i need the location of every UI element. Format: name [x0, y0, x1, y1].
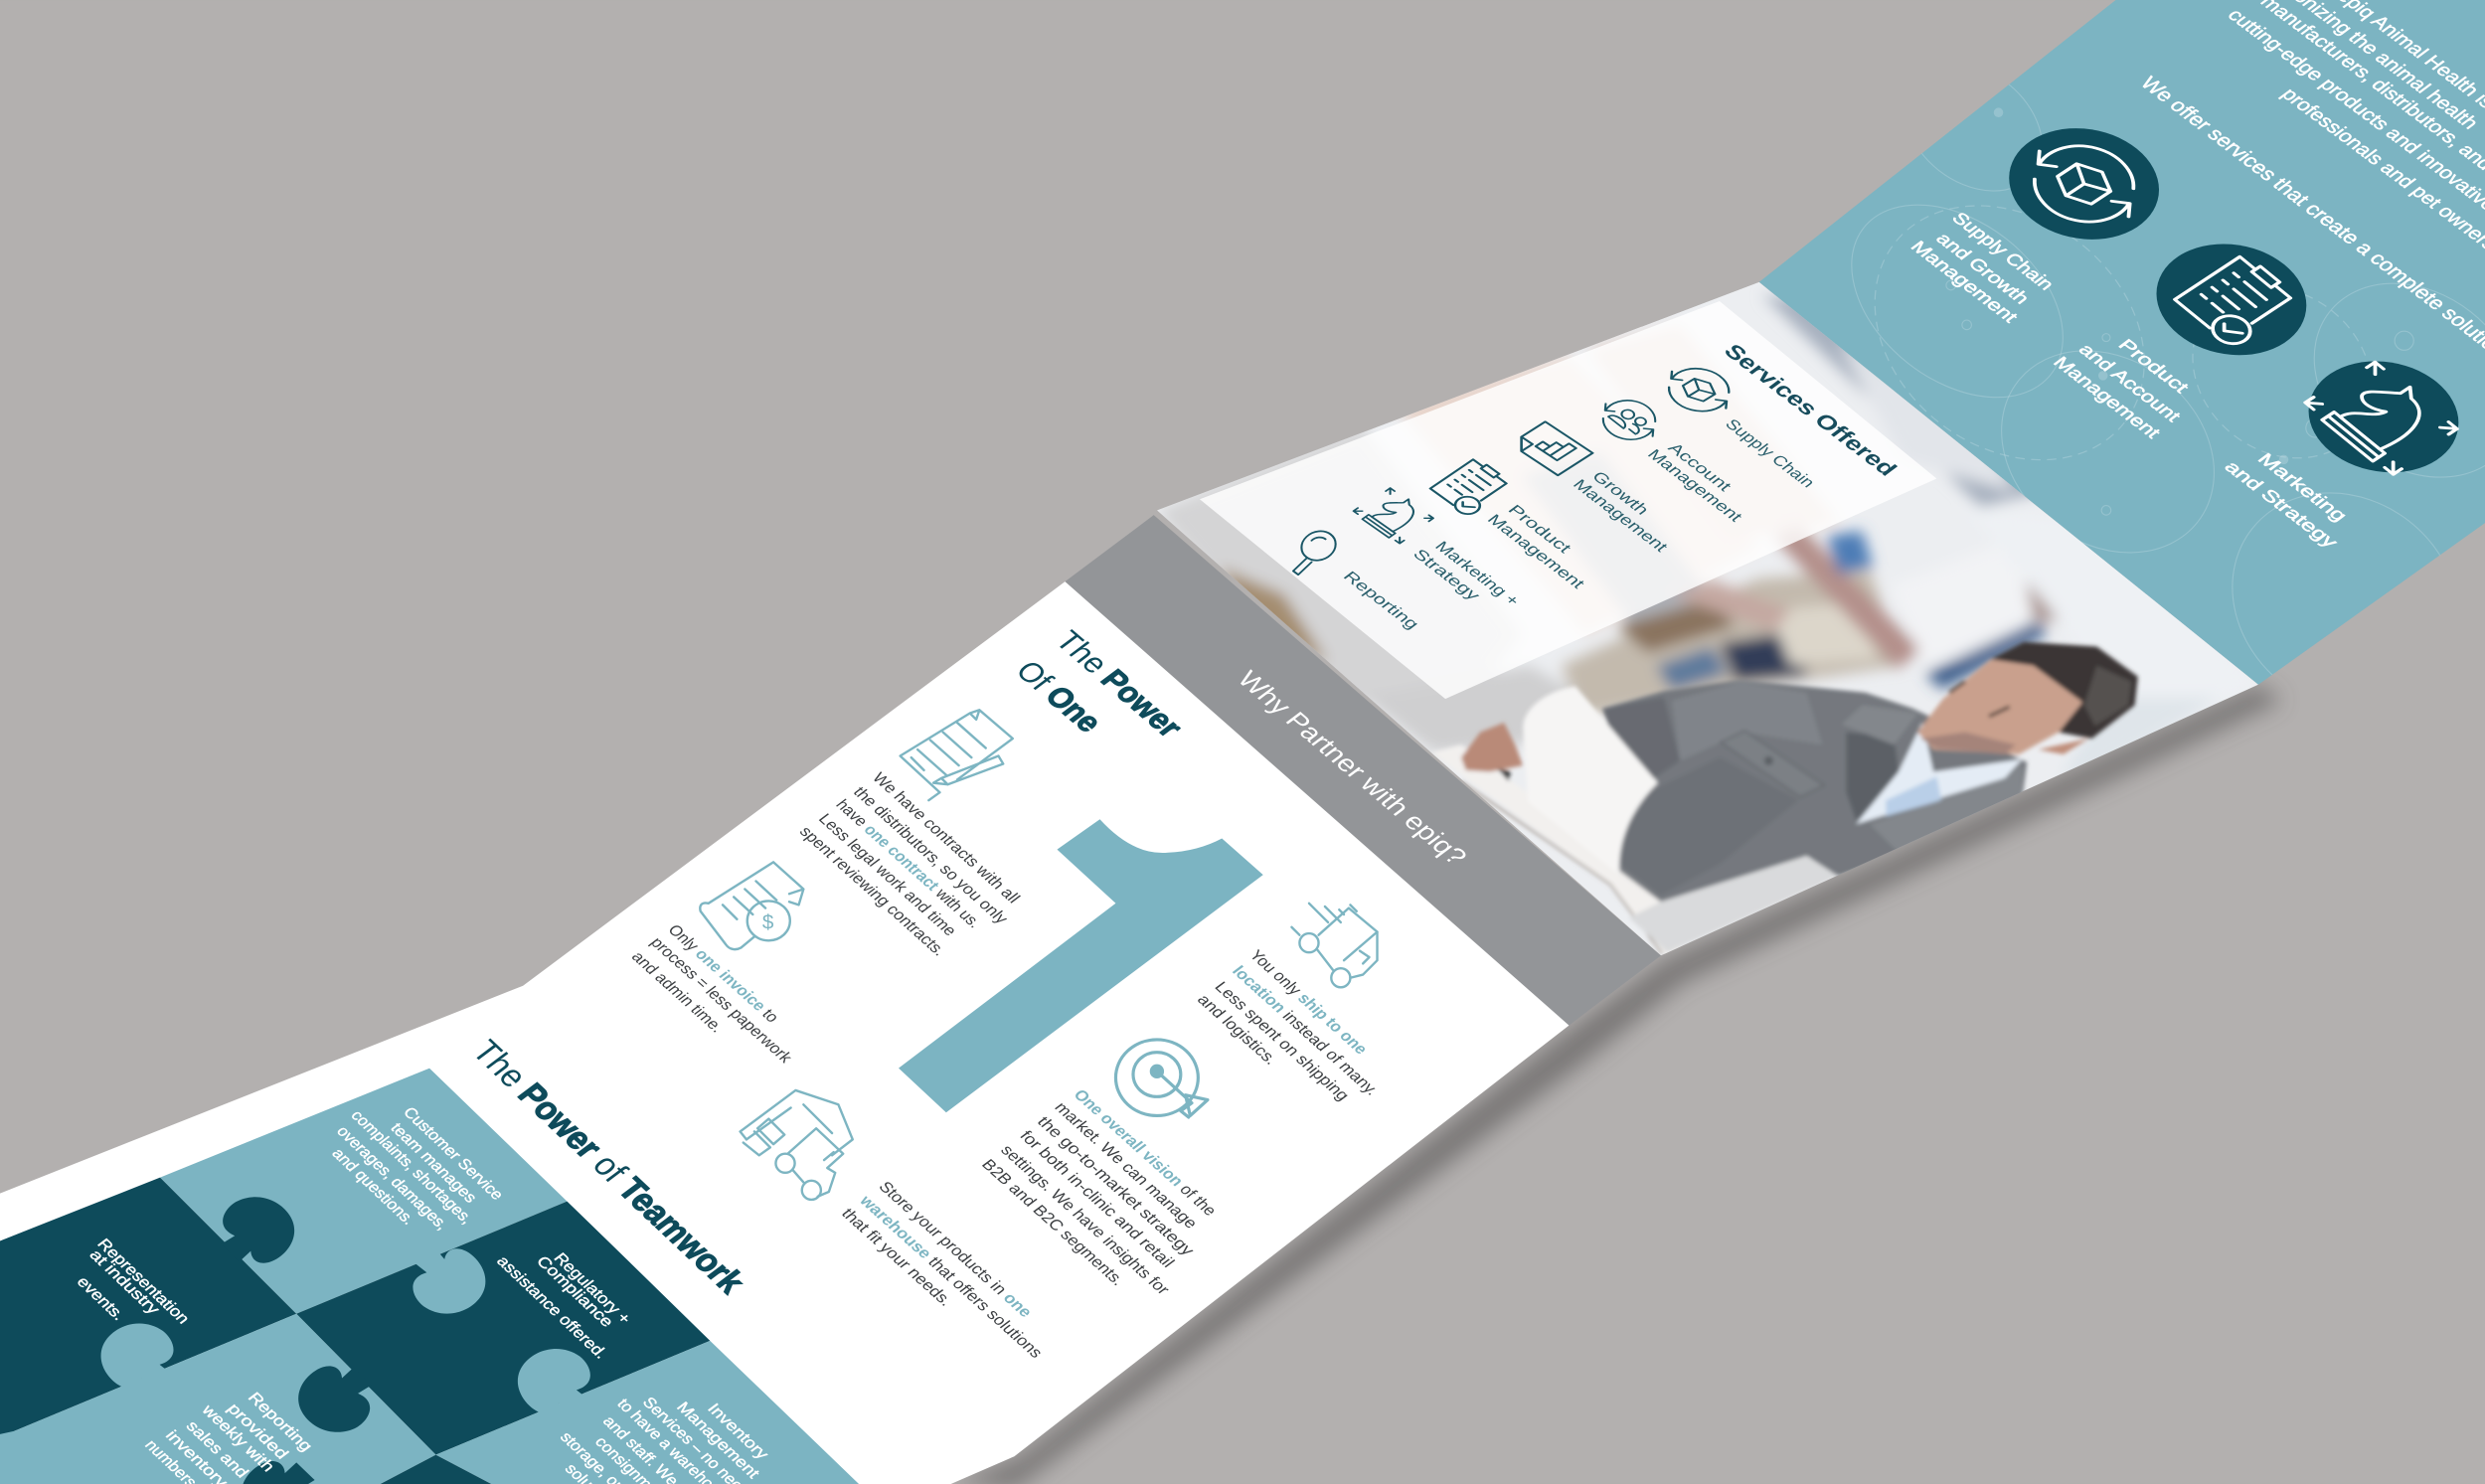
text: one invoice: and admin time. — [627, 948, 728, 1036]
text: reporting: weekly with — [197, 1402, 278, 1475]
label: marketing and strategy: and Strategy — [2221, 457, 2344, 552]
text: one contract: Less legal work and time — [815, 810, 961, 939]
knob: light into regulatory — [413, 1248, 485, 1314]
icon: strategy knight — [1352, 486, 1436, 545]
text: one overall vision: market. We can manage — [1051, 1098, 1202, 1232]
text: ship to one location: Less spent on shipping — [1211, 978, 1354, 1104]
icon: marketing knight circle — [2277, 339, 2485, 495]
icon: supply chain circle — [1978, 105, 2190, 262]
text: one overall vision — [978, 1086, 1221, 1298]
puzzle — [0, 1069, 859, 1484]
puzzle piece: reporting — [0, 1314, 435, 1484]
icon: product clipboard — [1428, 457, 1515, 518]
blurred warehouse backdrop — [1157, 295, 2258, 776]
text: one overall vision: B2B and B2C segments. — [978, 1156, 1129, 1289]
service labels: Supply Chain — [1721, 416, 1818, 491]
icon: reporting magnifier — [1280, 525, 1343, 579]
text: ship to one location: You only ship to one — [1245, 946, 1372, 1058]
text: one warehouse: Store your products in one — [875, 1178, 1037, 1320]
service labels: Growth — [1588, 469, 1653, 518]
service labels: Strategy — [1408, 547, 1484, 604]
text: representation: at industry — [85, 1246, 164, 1318]
knob: light into representation — [101, 1324, 173, 1387]
knob: dark into customer service — [223, 1197, 294, 1263]
label: product and account: Product — [2114, 335, 2194, 396]
text: one invoice: Only one invoice to — [664, 921, 783, 1026]
text: one overall vision: for both in-clinic and retail — [1016, 1127, 1179, 1271]
text: customer service — [328, 1104, 507, 1233]
heading: services offered: Services Offered — [1719, 340, 1903, 480]
label: supply chain and growth — [1906, 209, 2059, 326]
label: marketing and strategy — [2221, 449, 2352, 552]
puzzle piece: bottom dark — [381, 1455, 491, 1484]
icon: supply chain — [1652, 357, 1746, 422]
text: regulatory: assistance offered. — [493, 1253, 611, 1362]
panel: services offered list — [1280, 340, 1903, 632]
heading: the power of one: The Power — [1049, 624, 1190, 742]
puzzle piece: customer service — [160, 1069, 568, 1314]
text: reporting: Reporting — [245, 1390, 316, 1454]
text: inventory management: Management — [673, 1399, 763, 1482]
panel: services offered card — [1200, 301, 1936, 699]
service labels: Management — [1643, 446, 1746, 525]
knob: dark into reporting lower — [243, 1461, 314, 1484]
heading: the power of one: Of One — [1009, 655, 1109, 738]
icon: invoice: $ — [762, 910, 774, 933]
text: one overall vision: settings. We have insights for — [997, 1142, 1174, 1298]
icon: account management — [1588, 390, 1670, 450]
service labels: Marketing + — [1431, 539, 1524, 609]
text: one invoice: process = less paperwork — [646, 934, 797, 1067]
text: one contract: have one contract with us. — [832, 796, 985, 931]
text: regulatory: Compliance — [533, 1253, 617, 1330]
network pattern — [1851, 84, 2485, 675]
text: ship to one location: location instead of many. — [1229, 962, 1383, 1098]
service labels: Management — [1569, 476, 1672, 555]
heading: why partner with epiq: Why Partner with epiq? — [1232, 666, 1473, 870]
paper shadow — [951, 685, 2282, 1484]
heading: the power of teamwork: The Power of Teamwork — [464, 1034, 752, 1300]
big numeral one — [899, 819, 1263, 1112]
label: supply chain and growth: Management — [1906, 238, 2023, 326]
label: product and account — [2050, 335, 2194, 441]
text: representation: Representation — [93, 1236, 193, 1327]
text: one overall vision: One overall vision of the — [1070, 1086, 1221, 1219]
icon: product clipboard circle — [2125, 222, 2338, 378]
service labels: Product — [1504, 502, 1575, 557]
text: one contract: We have contracts with all — [869, 769, 1024, 907]
text: one contract: the distributors, so you only — [850, 783, 1013, 927]
panel: teal intro — [1759, 0, 2485, 756]
label: marketing and strategy: Marketing — [2253, 449, 2352, 525]
label: product and account: and Account — [2074, 340, 2186, 424]
puzzle piece: inventory — [435, 1341, 859, 1484]
text: one contract: spent reviewing contracts. — [795, 823, 950, 959]
panel: power of one — [627, 624, 1383, 1361]
icon: delivery truck — [1291, 904, 1378, 987]
text: one warehouse: that fit your needs. — [838, 1205, 956, 1309]
text: customer service: and questions. — [328, 1145, 418, 1228]
service labels — [1339, 416, 1818, 632]
text: regulatory: Regulatory + — [550, 1250, 634, 1327]
panel: power of teamwork — [0, 1034, 859, 1484]
knob: light into regulatory lower — [517, 1349, 590, 1411]
text: reporting — [141, 1390, 316, 1484]
icon: contract document — [901, 710, 1013, 800]
man at desk — [1431, 642, 2138, 967]
icon: target — [1115, 1040, 1208, 1117]
text: customer service: team manages — [387, 1120, 480, 1206]
text: customer service: overages, damages, — [333, 1123, 452, 1233]
text: representation: events. — [73, 1273, 128, 1324]
icon: growth chart — [1510, 421, 1592, 475]
text: inventory management: Inventory — [704, 1401, 772, 1463]
text: reporting: provided — [224, 1401, 292, 1462]
laptop — [1629, 856, 1838, 952]
label: product and account: Management — [2050, 353, 2165, 441]
panel: photo — [1157, 282, 2258, 967]
icon: warehouse and truck — [741, 1090, 853, 1200]
text: ship to one location: and logistics. — [1194, 991, 1281, 1068]
puzzle piece: regulatory — [296, 1202, 710, 1455]
label: supply chain and growth: Supply Chain — [1947, 209, 2059, 293]
panel: white paper — [0, 581, 1569, 1484]
icon: invoice — [700, 862, 803, 949]
text: inventory management — [557, 1395, 772, 1484]
text: one overall vision: the go-to-market strategy — [1034, 1113, 1199, 1259]
text: customer service: complaints, shortages, — [347, 1107, 476, 1227]
text: reporting: sales and — [182, 1418, 251, 1481]
text: one warehouse: warehouse that offers solutions — [855, 1192, 1047, 1361]
text: customer service: Customer Service — [400, 1104, 507, 1203]
label: supply chain and growth: and Growth — [1932, 230, 2034, 307]
text: reporting: inventory — [162, 1427, 232, 1484]
knob: dark into reporting — [298, 1366, 370, 1432]
service labels: Management — [1483, 512, 1588, 592]
service labels: Reporting — [1339, 569, 1422, 632]
service labels: Account — [1664, 440, 1736, 495]
panel: grey band — [1065, 515, 1661, 1026]
text: one contract — [795, 769, 1024, 959]
puzzle piece: representation — [0, 1178, 296, 1442]
